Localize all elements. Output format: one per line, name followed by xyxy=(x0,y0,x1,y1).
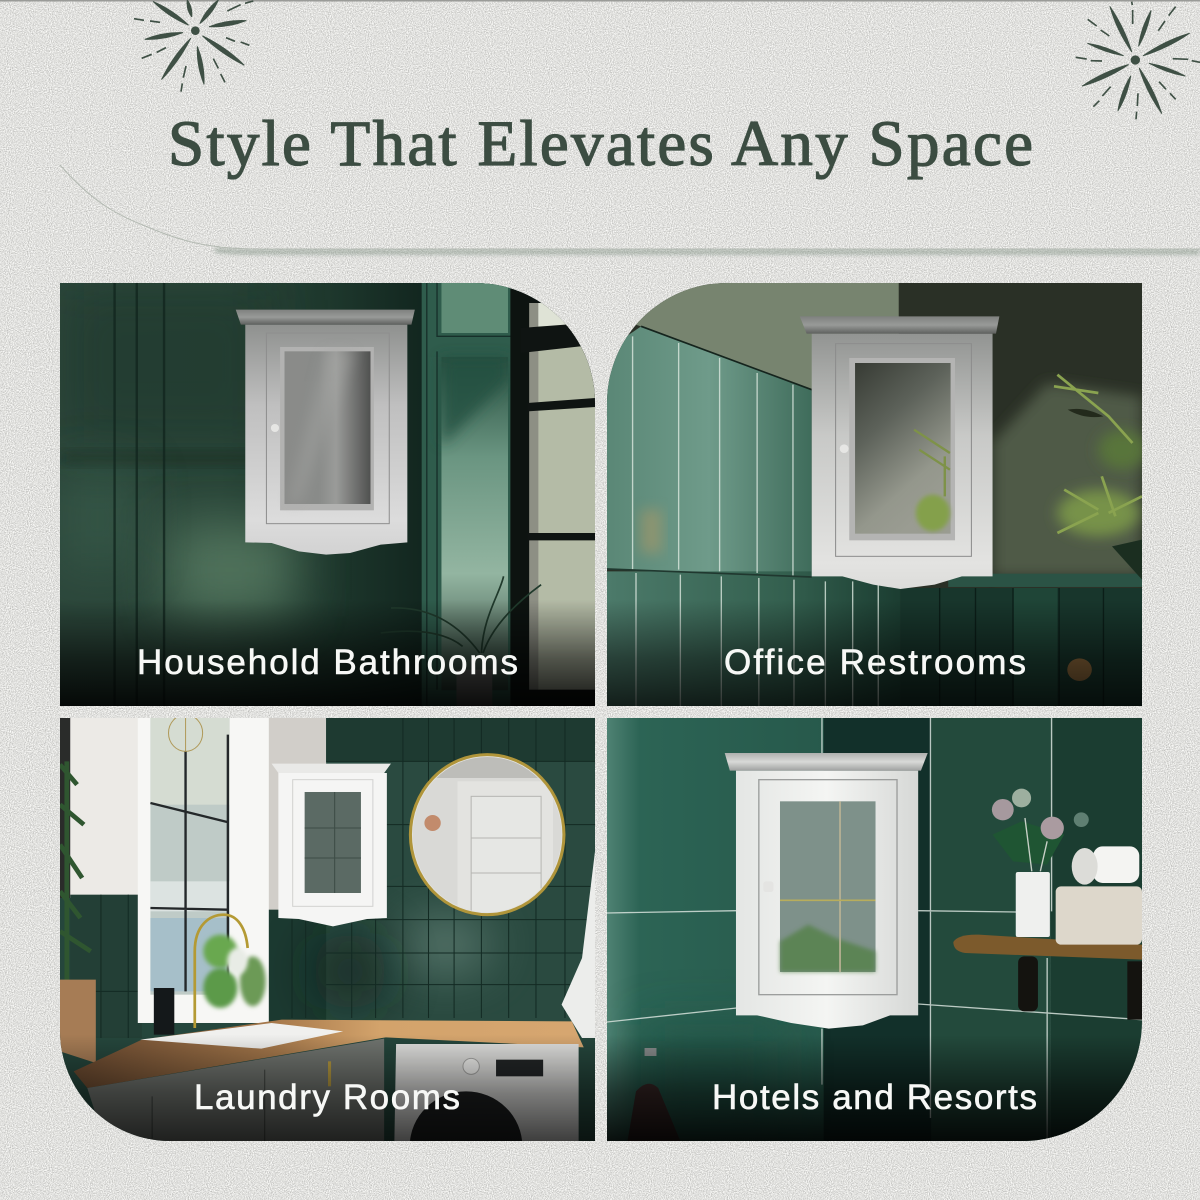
icon: starburst right xyxy=(1076,2,1200,119)
left plant and basket xyxy=(60,761,96,1063)
towel xyxy=(562,851,595,1038)
walls xyxy=(607,283,1142,706)
label: Hotels and Resorts xyxy=(712,1078,1037,1117)
wall xyxy=(60,283,595,706)
title: Style That Elevates Any Space xyxy=(168,108,1033,180)
towel hook xyxy=(627,1048,680,1141)
panel: laundry rooms xyxy=(60,718,595,1141)
label: Office Restrooms xyxy=(724,643,1026,682)
window xyxy=(510,283,595,706)
cabinet xyxy=(236,310,415,555)
hook xyxy=(1067,658,1092,681)
cabinet xyxy=(800,316,999,589)
washing machine xyxy=(394,1044,579,1141)
walls xyxy=(607,718,1142,1141)
vase and flowers xyxy=(992,789,1089,937)
cabinet xyxy=(725,753,928,1029)
shelf xyxy=(953,935,1142,1020)
icon: starburst left xyxy=(134,0,253,92)
tiles xyxy=(607,326,1142,706)
round mirror xyxy=(410,751,565,918)
label: Household Bathrooms xyxy=(137,643,518,682)
walls xyxy=(60,718,595,1141)
panel: hotels and resorts xyxy=(607,718,1142,1141)
window xyxy=(138,715,269,1023)
plant xyxy=(1054,375,1146,580)
cabinet xyxy=(272,764,391,926)
towels and box xyxy=(1056,846,1142,945)
counter xyxy=(74,1020,584,1141)
panel: office restrooms xyxy=(607,283,1146,706)
panel: household bathrooms xyxy=(60,283,595,706)
hanging plants xyxy=(154,915,266,1035)
plant xyxy=(381,576,541,653)
label: Laundry Rooms xyxy=(194,1078,460,1117)
